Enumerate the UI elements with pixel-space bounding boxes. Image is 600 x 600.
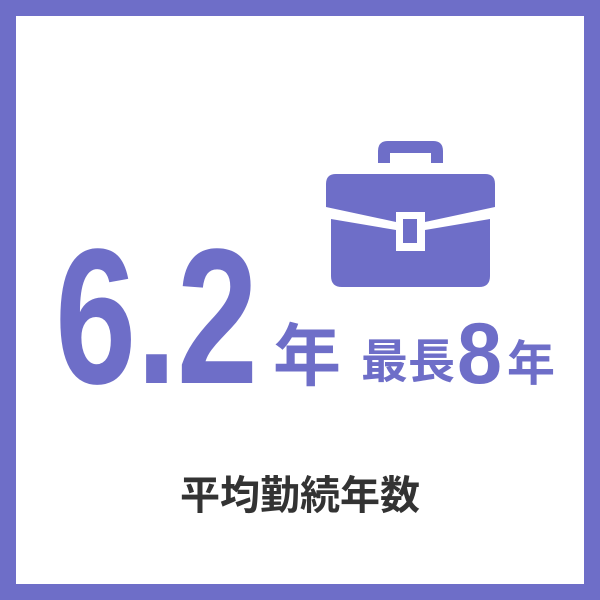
max value 8: 8	[457, 306, 502, 402]
max unit 年: 年	[507, 338, 555, 391]
icon: briefcase	[326, 141, 495, 287]
main value 6.2: 6.2	[55, 208, 258, 424]
max label 最長: 最長	[361, 335, 455, 388]
unit 年 large: 年	[273, 319, 341, 395]
caption: 平均勤続年数	[180, 474, 420, 518]
